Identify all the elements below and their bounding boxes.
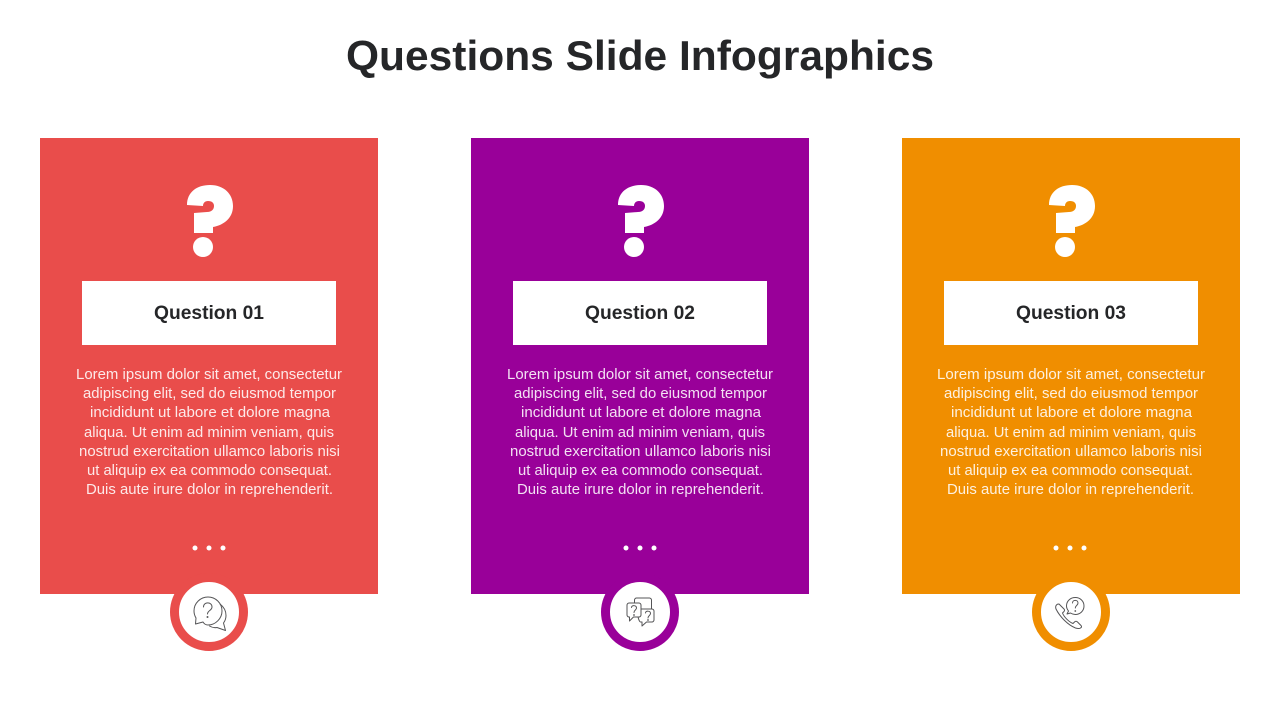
body text: ut aliquip ex ea commodo consequat. — [87, 463, 332, 479]
body text: adipiscing elit, sed do eiusmod tempor — [514, 386, 767, 402]
icon: large question mark — [187, 185, 233, 257]
heading box — [82, 281, 336, 345]
body text: aliqua. Ut enim ad minim veniam, quis — [946, 425, 1196, 441]
body text: Duis aute irure dolor in reprehenderit. — [86, 482, 333, 498]
panel: question 02 — [471, 138, 809, 646]
body text: Duis aute irure dolor in reprehenderit. — [947, 482, 1194, 498]
icon: large question mark — [618, 185, 664, 257]
body text: incididunt ut labore et dolore magna — [521, 405, 762, 421]
card background — [40, 138, 378, 594]
body text: ut aliquip ex ea commodo consequat. — [948, 463, 1193, 479]
title: Questions Slide Infographics — [346, 32, 934, 79]
body text — [76, 367, 342, 498]
body text: incididunt ut labore et dolore magna — [90, 405, 331, 421]
card background — [902, 138, 1240, 594]
panel: question 01 — [40, 138, 378, 646]
icon: large question mark — [1049, 185, 1095, 257]
heading box: Question 02 — [585, 303, 695, 324]
ellipsis dots — [192, 546, 226, 550]
icon badge: speech bubbles with question mark — [174, 578, 244, 646]
body text: Lorem ipsum dolor sit amet, consectetur — [507, 367, 773, 383]
ellipsis dots — [1054, 546, 1086, 550]
body text: aliqua. Ut enim ad minim veniam, quis — [84, 425, 334, 441]
body text: nostrud exercitation ullamco laboris nisi — [79, 444, 340, 460]
body text: incididunt ut labore et dolore magna — [951, 405, 1193, 421]
ellipsis dots — [624, 546, 656, 550]
body text: aliqua. Ut enim ad minim veniam, quis — [515, 425, 765, 441]
icon badge: phone with question bubble — [1036, 578, 1106, 646]
heading box — [944, 281, 1198, 345]
heading box: Question 03 — [1016, 303, 1126, 324]
body text: ut aliquip ex ea commodo consequat. — [518, 463, 763, 479]
body text — [507, 367, 773, 498]
body text: adipiscing elit, sed do eiusmod tempor — [83, 386, 336, 402]
body text: adipiscing elit, sed do eiusmod tempor — [944, 386, 1198, 402]
body text: nostrud exercitation ullamco laboris nisi — [940, 444, 1202, 460]
body text — [937, 367, 1205, 498]
body text: nostrud exercitation ullamco laboris nisi — [510, 444, 771, 460]
body text: Duis aute irure dolor in reprehenderit. — [517, 482, 764, 498]
body text: Lorem ipsum dolor sit amet, consectetur — [937, 367, 1205, 383]
heading box — [513, 281, 767, 345]
panel: question 03 — [902, 138, 1240, 646]
icon badge: multiple chat bubbles — [606, 578, 674, 646]
card background — [471, 138, 809, 594]
body text: Lorem ipsum dolor sit amet, consectetur — [76, 367, 342, 383]
heading box: Question 01 — [154, 303, 264, 324]
